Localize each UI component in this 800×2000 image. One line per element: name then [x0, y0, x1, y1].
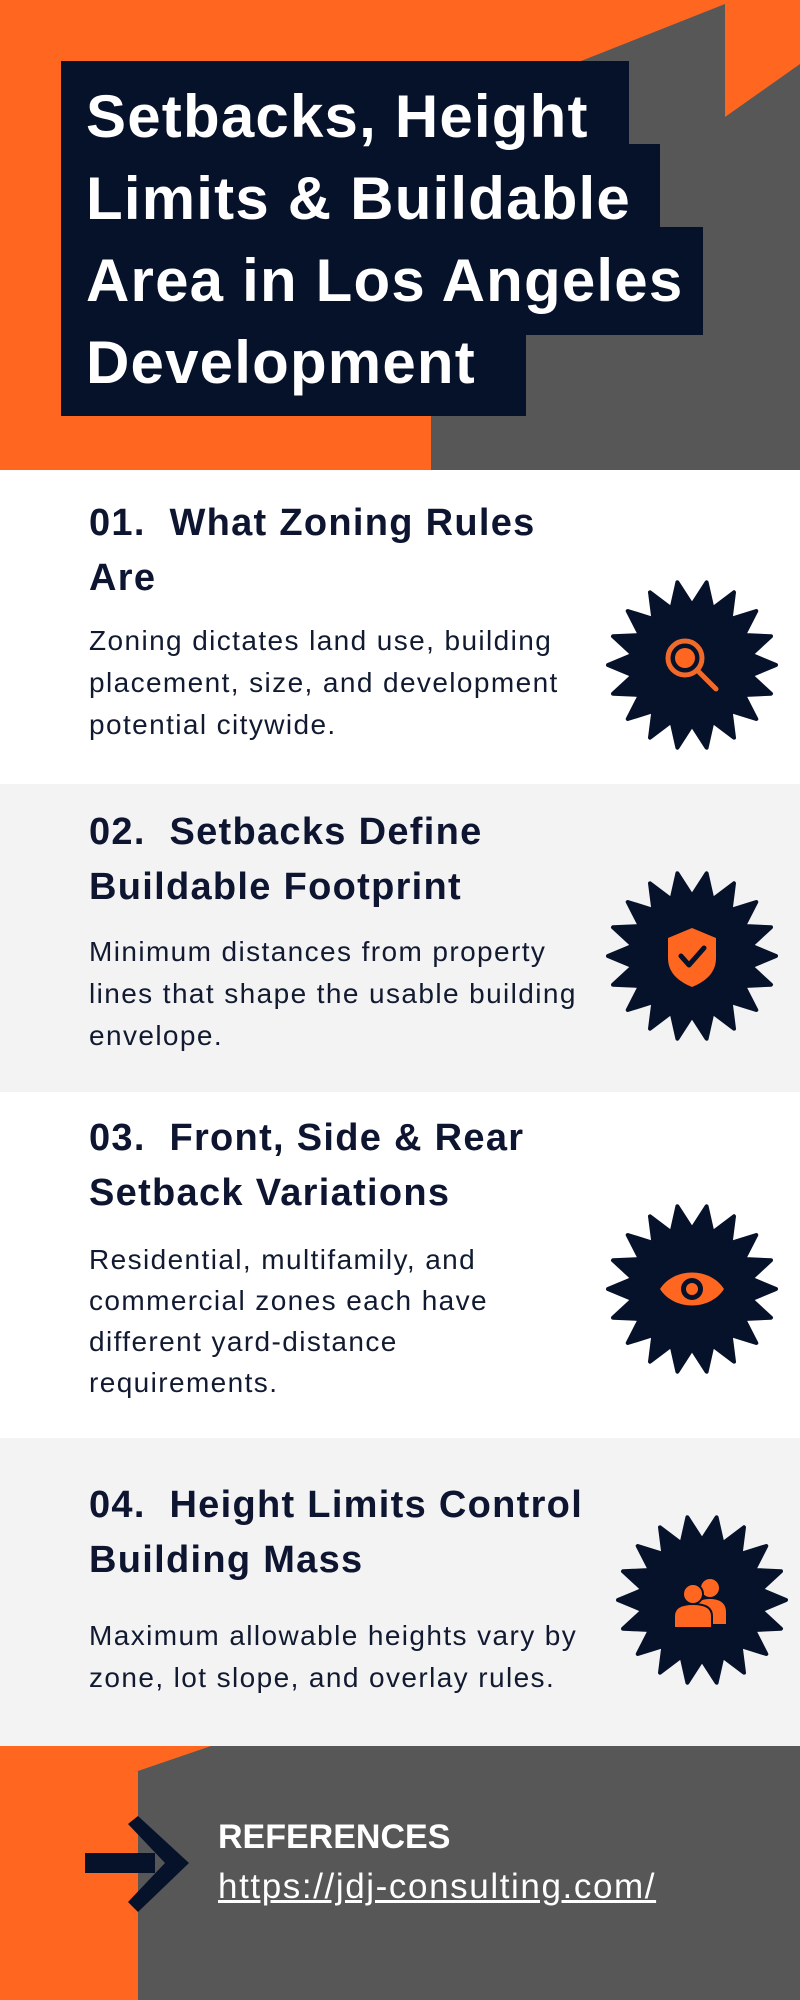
icon: magnifier: [606, 580, 778, 750]
body 4: Maximum allowable heights vary by: [89, 1620, 577, 1651]
heading 4: Building Mass: [89, 1539, 363, 1581]
heading 2: Buildable Footprint: [89, 866, 462, 908]
body 3: commercial zones each have: [89, 1285, 488, 1316]
header background: [0, 0, 800, 470]
icon: eye: [606, 1204, 778, 1374]
body 3: different yard-distance: [89, 1326, 398, 1357]
title block: Setbacks, Height: [86, 83, 589, 150]
section 1 panel: [0, 470, 800, 784]
references heading: REFERENCES: [218, 1818, 450, 1856]
heading 2: [89, 811, 483, 908]
title block: Development: [86, 329, 476, 396]
heading 4: [89, 1484, 583, 1581]
footer background: [0, 1746, 800, 2000]
icon: people: [616, 1515, 788, 1685]
heading 4: 04. Height Limits Control: [89, 1484, 583, 1526]
body 1: placement, size, and development: [89, 667, 559, 698]
heading 3: 03. Front, Side & Rear: [89, 1117, 524, 1159]
body 2: [89, 936, 577, 1051]
body 4: zone, lot slope, and overlay rules.: [89, 1662, 555, 1693]
heading 1: [89, 502, 536, 599]
heading 3: [89, 1117, 524, 1214]
body 3: Residential, multifamily, and: [89, 1244, 476, 1275]
section 4 panel: [0, 1438, 800, 1746]
body 1: Zoning dictates land use, building: [89, 625, 552, 656]
heading 2: 02. Setbacks Define: [89, 811, 483, 853]
body 4: [89, 1620, 577, 1693]
body 2: envelope.: [89, 1020, 223, 1051]
body 2: lines that shape the usable building: [89, 978, 577, 1009]
arrow: [85, 1816, 189, 1912]
section 2 panel: [0, 784, 800, 1092]
body 2: Minimum distances from property: [89, 936, 546, 967]
section 3 panel: [0, 1092, 800, 1438]
title block: [61, 61, 703, 416]
body 3: [89, 1244, 488, 1398]
body 1: [89, 625, 559, 740]
title block: Limits & Buildable: [86, 165, 631, 232]
icon: shield check: [606, 871, 778, 1041]
title block: Area in Los Angeles: [86, 247, 683, 314]
body 1: potential citywide.: [89, 709, 337, 740]
body 3: requirements.: [89, 1367, 278, 1398]
references url: https://jdj-consulting.com/: [218, 1867, 656, 1906]
heading 1: 01. What Zoning Rules: [89, 502, 536, 544]
heading 1: Are: [89, 557, 156, 599]
heading 3: Setback Variations: [89, 1172, 450, 1214]
